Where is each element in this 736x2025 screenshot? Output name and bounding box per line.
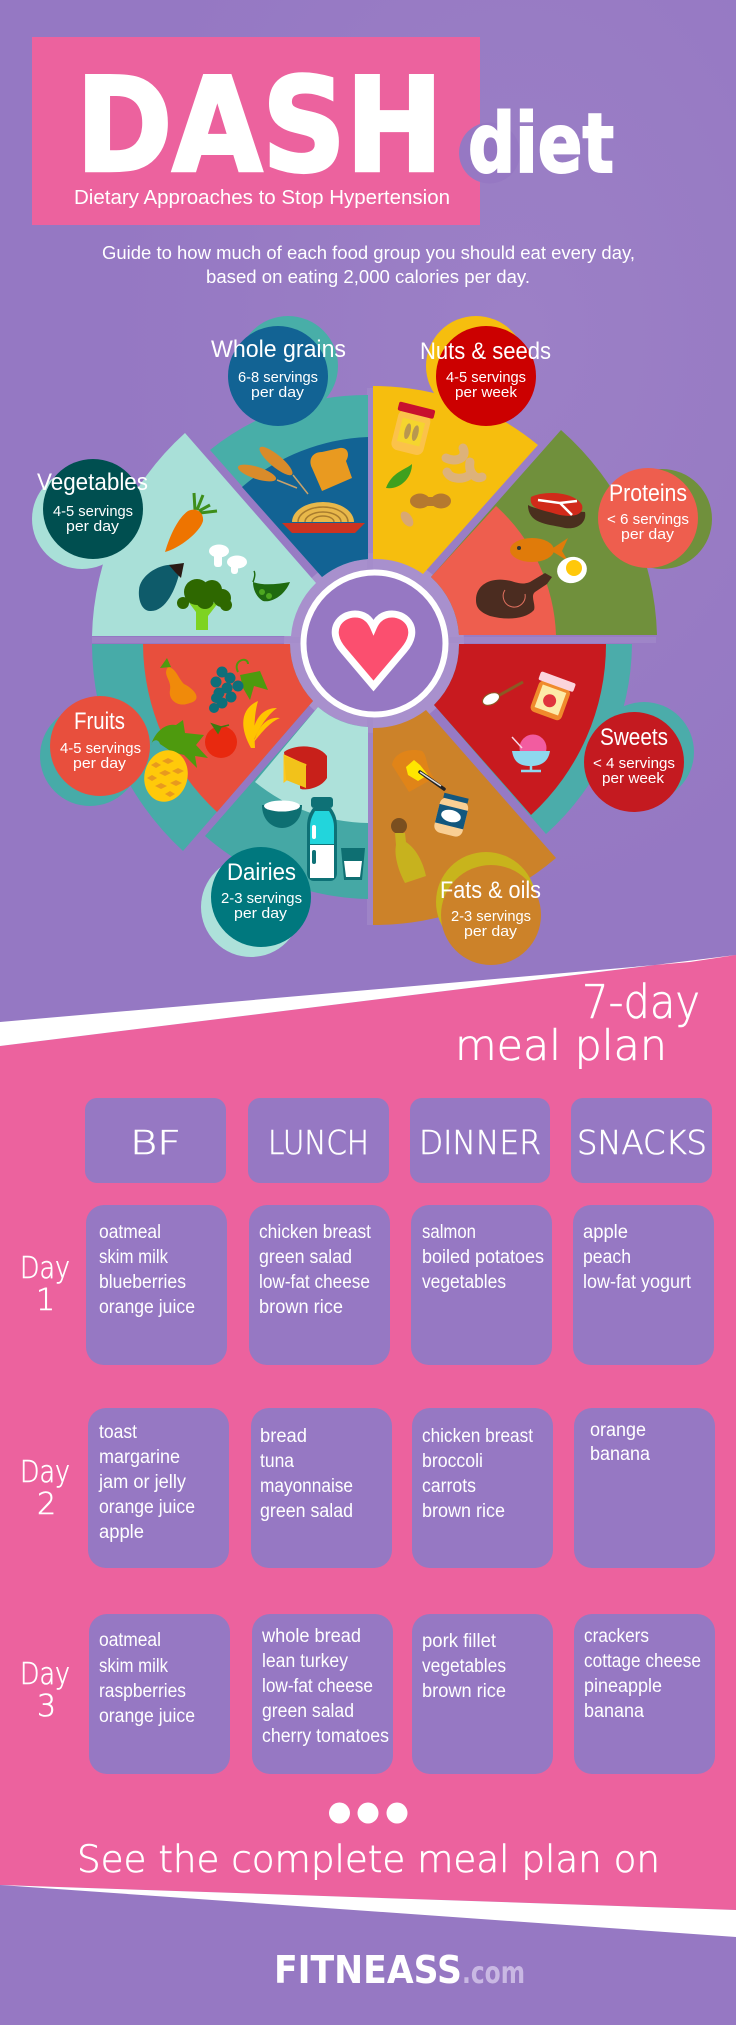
brand logo: FITNEASS <box>274 1948 462 1992</box>
panel: fruits sector <box>92 644 313 851</box>
label: dairies <box>201 847 311 957</box>
icon: pea pod <box>253 571 290 601</box>
label: whole grains: 6-8 servings <box>238 369 318 386</box>
panel: day 2: broccoli <box>422 1451 483 1472</box>
icon: milk bottle <box>307 797 337 881</box>
panel: dairies sector <box>205 707 368 899</box>
panel: day 1: oatmeal <box>99 1222 161 1243</box>
heading: 7-day meal plan: meal plan <box>455 1021 667 1070</box>
panel: day 1: salmon <box>422 1222 476 1243</box>
icon: ellipsis dots <box>329 1802 408 1824</box>
label: proteins <box>598 468 712 569</box>
label: fruits: Fruits <box>74 708 125 735</box>
intro text: Guide to how much of each food group you should eat every day, <box>102 243 635 263</box>
label: dairies: 2-3 servings <box>221 890 302 907</box>
panel: proteins sector <box>431 430 657 635</box>
panel: day 1: apple <box>583 1222 628 1243</box>
panel: day 2 <box>20 1408 715 1568</box>
panel: day 1: orange juice <box>99 1297 195 1318</box>
panel: day 3: pork fillet <box>422 1631 497 1652</box>
panel: day 3: raspberries <box>99 1681 186 1702</box>
panel: day 2: jam or jelly <box>98 1472 186 1493</box>
label: proteins: per day <box>621 526 675 543</box>
icon: jam jar <box>527 671 576 722</box>
icon: mushrooms <box>209 544 247 574</box>
panel: day 2: mayonnaise <box>260 1476 353 1497</box>
label: day 2: Day <box>20 1455 70 1490</box>
label: day 1 <box>20 1251 70 1318</box>
panel: column headers: BF <box>130 1123 181 1162</box>
panel: column headers: SNACKS <box>577 1123 707 1162</box>
label: sweets: per week <box>602 770 664 787</box>
panel: day 2: chicken breast <box>422 1426 534 1447</box>
panel: column headers: DINNER <box>419 1123 541 1162</box>
label: fruits: 4-5 servings <box>60 740 141 757</box>
panel: day 2: brown rice <box>422 1501 505 1522</box>
label: fats and oils: 2-3 servings <box>451 908 531 925</box>
icon: buttered toast <box>392 750 444 792</box>
label: dairies: Dairies <box>227 859 296 886</box>
panel: day 3 <box>20 1614 715 1774</box>
label: vegetables: Vegetables <box>37 469 148 496</box>
panel: day 3: lean turkey <box>262 1651 348 1672</box>
panel: vegetables sector <box>92 433 316 636</box>
panel: day 3: whole bread <box>261 1626 361 1647</box>
icon: steak <box>528 493 585 528</box>
icon: oil bottle <box>391 818 426 883</box>
panel: day 2: apple <box>99 1522 144 1543</box>
label: nuts and seeds <box>420 316 551 426</box>
panel: day 1: green salad <box>259 1247 352 1268</box>
label: day 2 <box>20 1455 70 1522</box>
heading: 7-day meal plan <box>455 975 700 1070</box>
icon: toast <box>310 448 352 491</box>
icon: apple <box>205 724 237 758</box>
label: day 3: 3 <box>37 1689 56 1724</box>
panel: day 3: oatmeal <box>99 1630 161 1651</box>
label: whole grains: Whole grains <box>211 336 346 363</box>
icon: pineapple <box>139 720 208 806</box>
panel: day 3: low-fat cheese <box>262 1676 373 1697</box>
panel: day 3: brown rice <box>422 1681 506 1702</box>
panel: day 2: toast <box>99 1422 138 1443</box>
title block <box>32 37 614 225</box>
intro text: based on eating 2,000 calories per day. <box>206 267 530 287</box>
icon: peanut butter jar <box>388 401 435 457</box>
icon: wheat <box>236 443 308 494</box>
label: sweets: Sweets <box>600 724 668 751</box>
panel: day 2: margarine <box>99 1447 180 1468</box>
icon: bananas <box>243 701 280 748</box>
label: fruits <box>40 696 150 806</box>
panel: day 2: orange juice <box>99 1497 195 1518</box>
brand logo: .com <box>462 1956 525 1991</box>
icon: roast turkey <box>476 573 552 618</box>
icon: broccoli <box>177 579 232 630</box>
icon: peanut <box>410 494 451 508</box>
label: vegetables <box>32 459 148 569</box>
icon: pear <box>160 658 197 705</box>
panel: day 1 <box>20 1205 714 1365</box>
panel: day 2: tuna <box>260 1451 294 1472</box>
panel: fats and oils sector <box>373 710 556 925</box>
panel: day 2: green salad <box>260 1501 353 1522</box>
panel: day 3: green salad <box>262 1701 354 1722</box>
panel: day 3: orange juice <box>99 1706 195 1727</box>
label: nuts and seeds: 4-5 servings <box>446 369 526 386</box>
icon: grapes <box>209 660 268 713</box>
panel: day 2: carrots <box>422 1476 476 1497</box>
panel: day 3: pineapple <box>584 1676 662 1697</box>
panel: day 3: banana <box>584 1701 644 1722</box>
panel: day 3: cottage cheese <box>584 1651 701 1672</box>
panel: day 2: orange <box>590 1420 646 1441</box>
panel: day 1: blueberries <box>99 1272 186 1293</box>
label: nuts and seeds: per week <box>455 384 517 401</box>
panel: food wheel <box>92 386 657 925</box>
panel: meal plan background <box>0 955 736 1910</box>
label: day 3 <box>20 1657 70 1724</box>
panel: sweets sector <box>434 644 632 834</box>
panel: whole grains sector <box>210 395 368 577</box>
label: whole grains: per day <box>251 384 305 401</box>
panel: day 3: cherry tomatoes <box>262 1726 389 1747</box>
label: fats and oils: per day <box>464 923 518 940</box>
label: proteins: Proteins <box>609 480 687 507</box>
panel: day 1: peach <box>583 1247 631 1268</box>
icon: ice cream <box>512 734 550 771</box>
icon: carrot <box>165 493 217 552</box>
subtitle: Dietary Approaches to Stop Hypertension <box>74 187 450 209</box>
heading: 7-day meal plan: 7-day <box>582 975 700 1029</box>
label: sweets: < 4 servings <box>593 755 675 772</box>
label: fruits: per day <box>73 755 127 772</box>
panel: day 1: vegetables <box>422 1272 506 1293</box>
panel: day 2: banana <box>590 1444 650 1465</box>
label: day 1: Day <box>20 1251 70 1286</box>
label: proteins: < 6 servings <box>607 511 689 528</box>
label: sweets <box>584 702 694 812</box>
icon: fish <box>510 538 568 562</box>
label: vegetables: 4-5 servings <box>53 503 133 520</box>
panel: day 1: low-fat yogurt <box>583 1272 692 1293</box>
panel: day 3: skim milk <box>99 1656 168 1677</box>
icon: bowl <box>262 800 302 828</box>
panel: column headers: LUNCH <box>268 1123 369 1162</box>
label: vegetables: per day <box>66 518 120 535</box>
label: fats and oils: Fats & oils <box>440 877 541 904</box>
panel: footer <box>0 1885 736 2025</box>
panel: day 1: brown rice <box>259 1297 343 1318</box>
panel: day 3: crackers <box>584 1626 649 1647</box>
label: day 1: 1 <box>36 1283 55 1318</box>
icon: cashews <box>446 448 482 478</box>
heading: diet: diet <box>468 97 614 192</box>
panel: day 1: low-fat cheese <box>259 1272 370 1293</box>
icon: eggplant <box>139 563 184 611</box>
label: dairies: per day <box>234 905 288 922</box>
label: day 3: Day <box>20 1657 70 1692</box>
panel: day 1: chicken breast <box>259 1222 372 1243</box>
icon: mayonnaise jar <box>433 792 471 838</box>
label: whole grains <box>211 316 346 426</box>
icon: pea <box>386 464 412 488</box>
icon: heart in ring <box>304 572 446 714</box>
panel: nuts and seeds sector <box>373 386 538 574</box>
panel: day 1: boiled potatoes <box>422 1247 544 1268</box>
label: nuts and seeds: Nuts & seeds <box>420 338 551 365</box>
call to action text: See the complete meal plan on <box>77 1838 660 1881</box>
panel: column headers <box>85 1098 712 1183</box>
icon: pasta plate <box>282 502 365 533</box>
heading: DASH: DASH <box>76 50 443 202</box>
icon: egg <box>554 554 590 586</box>
icon: sugar spoon <box>481 682 523 708</box>
icon: glass <box>341 848 365 880</box>
panel: day 1: skim milk <box>99 1247 168 1268</box>
label: day 2: 2 <box>37 1487 56 1522</box>
panel: day 2: bread <box>260 1426 307 1447</box>
icon: cheese wheel <box>284 746 327 789</box>
intro text <box>102 243 635 287</box>
icon: seed <box>398 509 416 529</box>
label: fats and oils <box>436 852 541 965</box>
panel: day 3: vegetables <box>422 1656 506 1677</box>
